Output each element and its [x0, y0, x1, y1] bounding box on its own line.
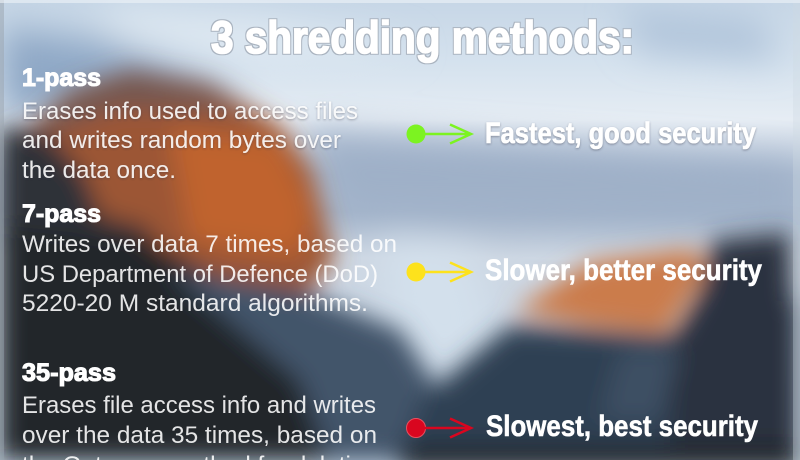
text block: 7-pass body: 5220-20 M standard algorithms. [22, 290, 368, 317]
text block: 1-pass body: Erases info used to access files [22, 98, 358, 125]
label: slowest: Slowest, best security [486, 410, 758, 443]
arrow: green dot to label [406, 124, 471, 144]
panel: 7-pass description [22, 200, 397, 317]
text block: 7-pass body: Writes over data 7 times, based on [22, 231, 397, 258]
heading: 7-pass: 7-pass [22, 200, 101, 228]
panel: 1-pass description [22, 64, 358, 184]
heading: 1-pass: 1-pass [22, 64, 101, 92]
text block: 35-pass body: Erases file access info and writes [22, 392, 376, 419]
arrow: yellow dot to label [406, 262, 471, 282]
arrow: red dot to label [406, 418, 471, 438]
label: fastest: Fastest, good security [485, 117, 756, 150]
panel: 35-pass description [22, 359, 378, 460]
text block: 35-pass body [22, 392, 378, 460]
heading: 35-pass: 35-pass [22, 359, 116, 387]
text block: 1-pass body: and writes random bytes over [22, 127, 341, 154]
text block: 1-pass body: the data once. [22, 157, 176, 184]
text block: 1-pass body [22, 98, 358, 184]
label: slower: Slower, better security [485, 254, 762, 287]
title: 3 shredding methods: [211, 12, 634, 63]
text block: 35-pass body: over the data 35 times, based on [22, 422, 377, 449]
text block: 7-pass body [22, 231, 397, 317]
text block: 7-pass body: US Department of Defence (DoD) [22, 261, 378, 288]
